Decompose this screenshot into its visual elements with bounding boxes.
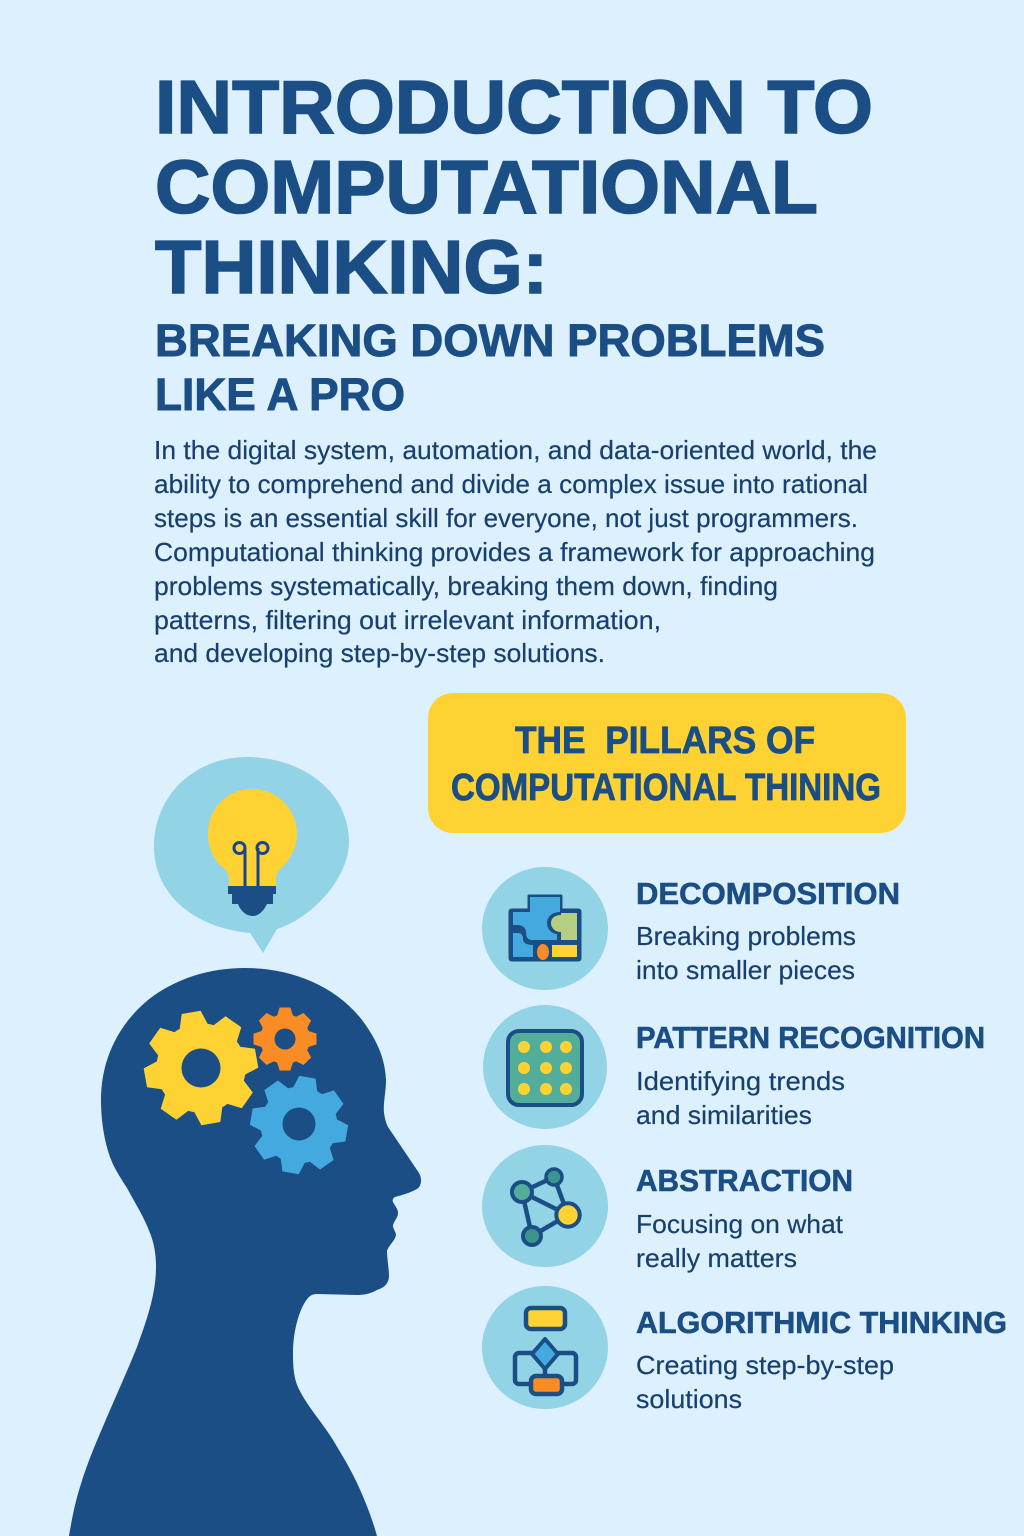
description: Focusing on what xyxy=(636,1209,844,1239)
description: Identifying trends xyxy=(636,1066,845,1096)
icon: dot grid xyxy=(483,1005,607,1129)
icon: lightbulb speech bubble xyxy=(154,757,349,953)
title: COMPUTATIONAL xyxy=(155,145,818,229)
intro paragraph: problems systematically, breaking them down, finding xyxy=(154,571,778,601)
intro paragraph: Computational thinking provides a framework for approaching xyxy=(154,537,875,567)
intro paragraph: and developing step-by-step solutions. xyxy=(154,638,605,668)
title xyxy=(155,65,873,309)
panel: pillars heading: THE PILLARS OF xyxy=(515,720,815,762)
intro paragraph xyxy=(154,435,877,668)
description: really matters xyxy=(636,1243,797,1273)
description xyxy=(636,1350,894,1414)
intro paragraph: patterns, filtering out irrelevant information, xyxy=(154,605,661,635)
icon: orange gear xyxy=(254,1008,316,1070)
subtitle xyxy=(155,315,825,420)
description: Breaking problems xyxy=(636,921,856,951)
intro paragraph: ability to comprehend and divide a complex issue into rational xyxy=(154,469,868,499)
subtitle: BREAKING DOWN PROBLEMS xyxy=(155,315,825,366)
title: THINKING: xyxy=(155,225,548,309)
head silhouette xyxy=(69,968,421,1536)
heading: ALGORITHMIC THINKING xyxy=(636,1305,1007,1340)
description: into smaller pieces xyxy=(636,955,855,985)
intro paragraph: steps is an essential skill for everyone, not just programmers. xyxy=(154,503,858,533)
panel: pillars heading xyxy=(428,693,906,833)
heading: PATTERN RECOGNITION xyxy=(636,1020,985,1055)
description: Creating step-by-step xyxy=(636,1350,894,1380)
intro paragraph: In the digital system, automation, and data-oriented world, the xyxy=(154,435,877,465)
description xyxy=(636,921,856,985)
pillar: decomposition xyxy=(482,867,900,990)
icon: blue gear xyxy=(243,1069,355,1181)
description: and similarities xyxy=(636,1100,812,1130)
heading: ABSTRACTION xyxy=(636,1163,853,1198)
pillar: abstraction xyxy=(482,1145,853,1273)
heading: DECOMPOSITION xyxy=(636,876,900,911)
icon: node network xyxy=(482,1145,608,1267)
icon: yellow gear xyxy=(136,1003,266,1133)
title: INTRODUCTION TO xyxy=(155,65,873,149)
description xyxy=(636,1066,845,1130)
description xyxy=(636,1209,844,1273)
pillar: pattern recognition xyxy=(483,1005,985,1130)
subtitle: LIKE A PRO xyxy=(155,369,405,420)
icon: puzzle xyxy=(482,867,608,990)
pillar: algorithmic thinking xyxy=(482,1286,1007,1414)
description: solutions xyxy=(636,1384,742,1414)
panel: pillars heading: COMPUTATIONAL THINING xyxy=(451,767,881,809)
icon: flowchart xyxy=(482,1286,608,1409)
